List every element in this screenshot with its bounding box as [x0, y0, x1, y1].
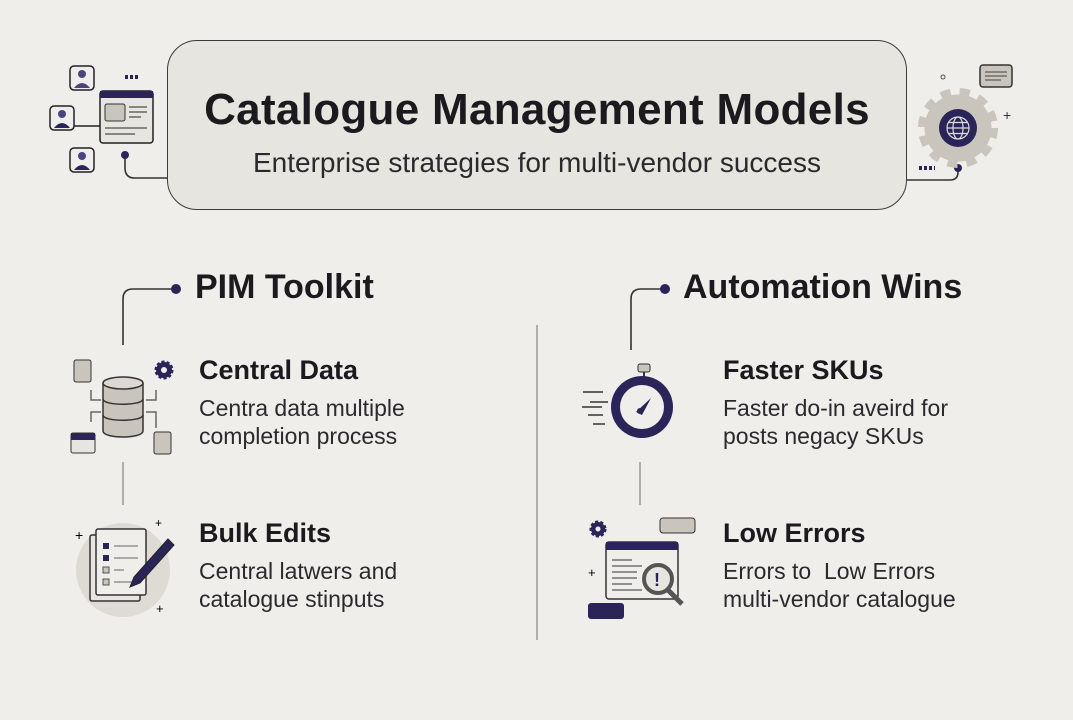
text: Bulk Edits: catalogue stinputs [199, 586, 384, 612]
title: Catalogue Management Models [204, 85, 870, 134]
icon: bulk edit: + [75, 527, 83, 543]
icon: error search: + [588, 565, 596, 580]
text: Central Data: completion process [199, 423, 397, 449]
heading: Automation Wins: Automation Wins [683, 268, 962, 306]
text: Low Errors [723, 518, 956, 612]
text: Low Errors: Low Errors [723, 518, 866, 548]
icon: stopwatch [582, 364, 673, 438]
text: Central Data: Centra data multiple [199, 395, 405, 421]
text: Low Errors: multi-vendor catalogue [723, 586, 956, 612]
icon: error search: ! [654, 570, 660, 590]
heading: PIM Toolkit: PIM Toolkit [195, 268, 374, 306]
title panel [167, 40, 907, 210]
text: Faster SKUs: Faster do-in aveird for [723, 395, 948, 421]
icon: bulk edit: + [156, 601, 164, 616]
icon: bulk edit: + [155, 516, 162, 530]
text: Bulk Edits [199, 518, 397, 612]
text: Faster SKUs: posts negacy SKUs [723, 423, 924, 449]
subtitle: Enterprise strategies for multi-vendor success [253, 147, 821, 178]
text: Bulk Edits: Bulk Edits [199, 518, 331, 548]
text: Low Errors: Errors to Low Errors [723, 558, 935, 584]
text: Faster SKUs [723, 355, 948, 449]
icon: gear globe [918, 64, 1013, 170]
icon: database [70, 360, 174, 454]
icon: users to browser [49, 65, 154, 173]
text: Faster SKUs: Faster SKUs [723, 355, 884, 385]
icon: error search [588, 518, 696, 619]
icon: gear globe: + [1003, 107, 1011, 123]
text: Central Data: Central Data [199, 355, 358, 385]
text: Bulk Edits: Central latwers and [199, 558, 397, 584]
icon: bulk edit [75, 516, 175, 617]
text: Central Data [199, 355, 405, 449]
